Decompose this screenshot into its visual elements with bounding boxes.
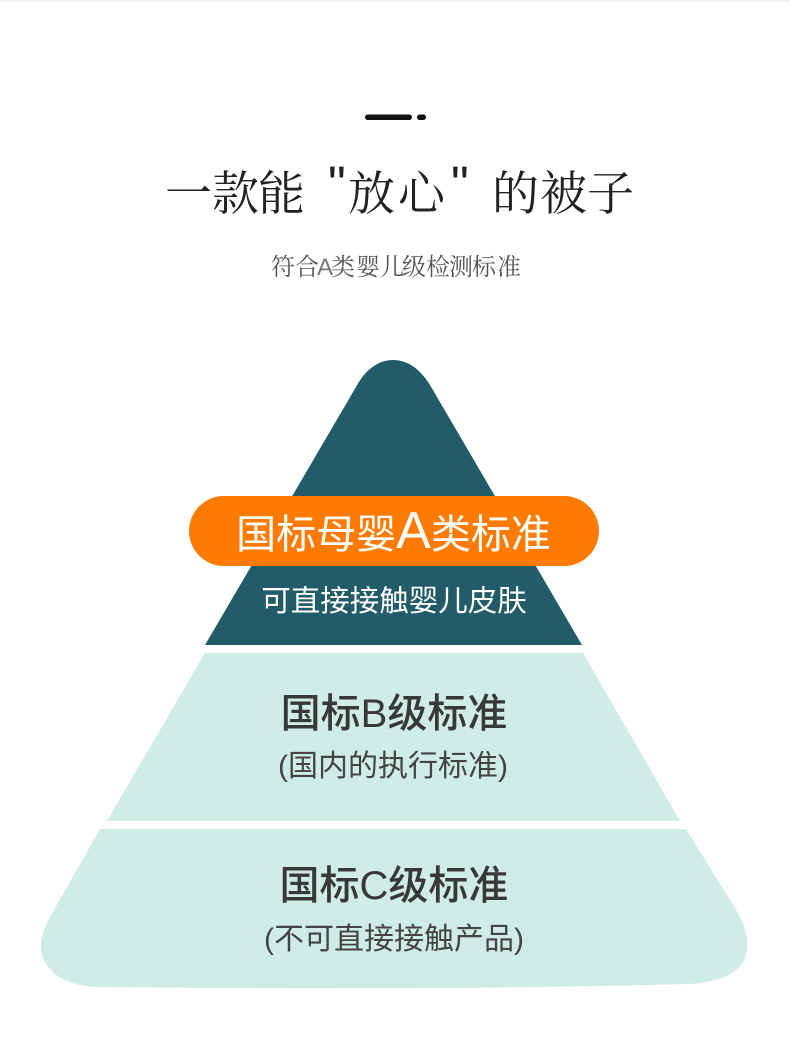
tier B note: (国内的执行标准) [278, 750, 508, 783]
pyramid tier: B [107, 653, 680, 821]
title: " [451, 156, 469, 212]
orange banner: A standard: 国标母婴A类标准 [236, 502, 551, 560]
subtitle: 符合 [271, 254, 319, 281]
tier B heading: 国标B级标准 [281, 692, 507, 736]
tier A description: 可直接接触婴儿皮肤 [261, 585, 527, 618]
subtitle: A [317, 254, 333, 281]
pyramid tier: A top [205, 360, 582, 645]
subtitle: 类婴儿级检测标准 [331, 254, 521, 281]
title accent mark [365, 114, 426, 120]
tier C heading: 国标C级标准 [280, 864, 508, 908]
title: 的被子 [492, 169, 634, 221]
tier C note: (不可直接接触产品) [264, 923, 524, 956]
title [165, 156, 634, 221]
title: 放心 [348, 169, 447, 221]
orange banner: A standard [189, 496, 599, 566]
pyramid tier: C [41, 829, 747, 988]
title: 一款能 [165, 169, 305, 221]
title: " [328, 156, 346, 212]
